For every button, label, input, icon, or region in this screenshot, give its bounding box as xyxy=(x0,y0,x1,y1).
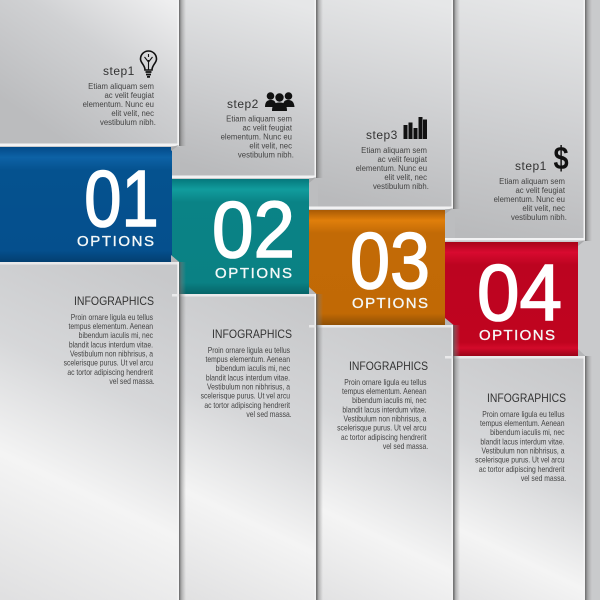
text block: infographics 4: Proin ornare ligula eu tellus xyxy=(482,409,565,419)
text block: infographics 3: ac tortor adipiscing hendrerit xyxy=(341,432,427,442)
text block: step 4 xyxy=(494,159,567,222)
text block: infographics 2: bibendum iaculis mi, nec xyxy=(216,363,290,373)
number 04: 04 xyxy=(477,248,562,337)
text block: infographics 3: Vestibulum non nibhrisus, a xyxy=(343,414,427,424)
text block: step 3 xyxy=(356,128,429,191)
text block: step 4: ac velit feugiat xyxy=(516,186,566,195)
text block: step 3: Etiam aliquam sem xyxy=(361,146,427,155)
panel: top sheet 1 xyxy=(0,0,179,151)
text block: step 2 xyxy=(221,97,294,160)
text block: infographics 1: tempus elementum. Aenean xyxy=(68,321,153,331)
panel: top sheet 4 xyxy=(445,0,586,246)
text block: step 2: elit velit, nec xyxy=(249,141,292,151)
text block: infographics 2: blandit lacus interdum vitae. xyxy=(206,373,290,383)
text block: infographics 2: Vestibulum non nibhrisus, a xyxy=(207,382,291,392)
text block: infographics 4: ac tortor adipiscing hendrerit xyxy=(479,464,565,474)
text block: step 1: Etiam aliquam sem xyxy=(88,82,154,91)
text block: infographics 3: vel sed massa. xyxy=(383,441,428,451)
text block: step 1: step1 xyxy=(103,64,135,78)
text block: step 1: ac velit feugiat xyxy=(105,91,155,100)
text block: infographics 2 xyxy=(201,327,292,419)
icon: light bulb xyxy=(140,51,156,77)
text block: infographics 4: scelerisque purus. Ut vel arcu xyxy=(475,455,564,465)
text block: infographics 4: INFOGRAPHICS xyxy=(487,391,566,405)
text block: step 2: ac velit feugiat xyxy=(243,123,293,133)
text block: infographics 4: Vestibulum non nibhrisus, a xyxy=(481,446,565,456)
text block: step 2: elementum. Nunc eu xyxy=(221,132,292,142)
panel: option 4 colour block xyxy=(445,242,578,356)
text block: step 2: vestibulum nibh. xyxy=(238,150,294,160)
text block: infographics 1 xyxy=(64,294,155,386)
text block: step 1: elit velit, nec xyxy=(111,109,154,118)
text block: infographics 1: vel sed massa. xyxy=(109,376,155,386)
text block: step 1: vestibulum nibh. xyxy=(100,118,156,127)
number 03: 03 xyxy=(350,216,430,305)
text block: infographics 4: blandit lacus interdum vitae. xyxy=(480,437,564,447)
panel: lower sheet 3 xyxy=(309,318,454,600)
text block: step 3: elit velit, nec xyxy=(384,173,427,182)
text block: step 4: vestibulum nibh. xyxy=(511,213,567,222)
text block: infographics 1: scelerisque purus. Ut vel arcu xyxy=(64,358,153,368)
text block: step 1: elementum. Nunc eu xyxy=(83,100,154,109)
text block: step 3: step3 xyxy=(366,128,398,142)
text block: infographics 4: tempus elementum. Aenean xyxy=(480,418,564,428)
label: options 4: OPTIONS xyxy=(479,327,555,344)
text block: step 4: step1 xyxy=(515,159,547,173)
text block: infographics 2: ac tortor adipiscing hendrerit xyxy=(204,400,291,410)
panel: lower sheet 4 xyxy=(445,349,586,600)
text block: step 2: Etiam aliquam sem xyxy=(226,114,292,124)
panel: top sheet 2 xyxy=(172,0,316,183)
text block: infographics 4: vel sed massa. xyxy=(521,473,566,483)
text block: infographics 2: INFOGRAPHICS xyxy=(212,327,292,341)
label: options 1: OPTIONS xyxy=(77,233,154,250)
label: options 3: OPTIONS xyxy=(352,295,428,312)
text block: step 1 xyxy=(83,64,156,127)
text block: infographics 2: scelerisque purus. Ut vel arcu xyxy=(201,391,290,401)
column shadows xyxy=(179,0,592,600)
text block: step 2: step2 xyxy=(227,97,259,111)
icon: bar chart xyxy=(404,117,427,139)
label: options 2: OPTIONS xyxy=(215,265,292,282)
panel: top sheet 3 xyxy=(309,0,454,214)
number 01: 01 xyxy=(84,154,159,243)
text block: infographics 3: scelerisque purus. Ut vel arcu xyxy=(337,423,426,433)
icon: people xyxy=(265,92,294,111)
text block: step 3: elementum. Nunc eu xyxy=(356,164,427,173)
text block: infographics 3: blandit lacus interdum vitae. xyxy=(342,405,426,415)
text block: step 4: elit velit, nec xyxy=(522,204,565,213)
panel: lower sheet 1 xyxy=(0,255,179,600)
text block: infographics 4 xyxy=(475,391,566,483)
panel: option 1 colour block xyxy=(0,147,172,262)
panel: option 3 colour block xyxy=(309,210,445,325)
text block: infographics 4: bibendum iaculis mi, nec xyxy=(490,427,565,437)
text block: infographics 3 xyxy=(337,359,428,451)
panel: lower sheet 2 xyxy=(172,287,316,600)
text block: infographics 2: tempus elementum. Aenean xyxy=(205,354,290,364)
text block: step 4: Etiam aliquam sem xyxy=(499,177,565,186)
text block: infographics 3: INFOGRAPHICS xyxy=(349,359,428,373)
text block: infographics 3: bibendum iaculis mi, nec xyxy=(352,395,427,405)
text block: infographics 1: blandit lacus interdum vitae. xyxy=(69,340,153,350)
text block: infographics 2: Proin ornare ligula eu tellus xyxy=(208,345,290,355)
number 02: 02 xyxy=(212,185,295,274)
text block: step 4: elementum. Nunc eu xyxy=(494,195,565,204)
text block: infographics 1: Proin ornare ligula eu tellus xyxy=(71,312,153,322)
icon: dollar sign: $ xyxy=(553,141,569,177)
text block: step 3: ac velit feugiat xyxy=(378,155,428,164)
text block: infographics 1: INFOGRAPHICS xyxy=(74,294,154,308)
text block: infographics 1: Vestibulum non nibhrisus, a xyxy=(70,349,154,359)
text block: infographics 2: vel sed massa. xyxy=(246,409,292,419)
text block: infographics 1: ac tortor adipiscing hendrerit xyxy=(67,367,154,377)
text block: step 3: vestibulum nibh. xyxy=(373,182,429,191)
text block: infographics 3: Proin ornare ligula eu tellus xyxy=(344,377,427,387)
text block: infographics 3: tempus elementum. Aenean xyxy=(342,386,426,396)
panel: option 2 colour block xyxy=(172,179,309,294)
text block: infographics 1: bibendum iaculis mi, nec xyxy=(79,330,153,340)
